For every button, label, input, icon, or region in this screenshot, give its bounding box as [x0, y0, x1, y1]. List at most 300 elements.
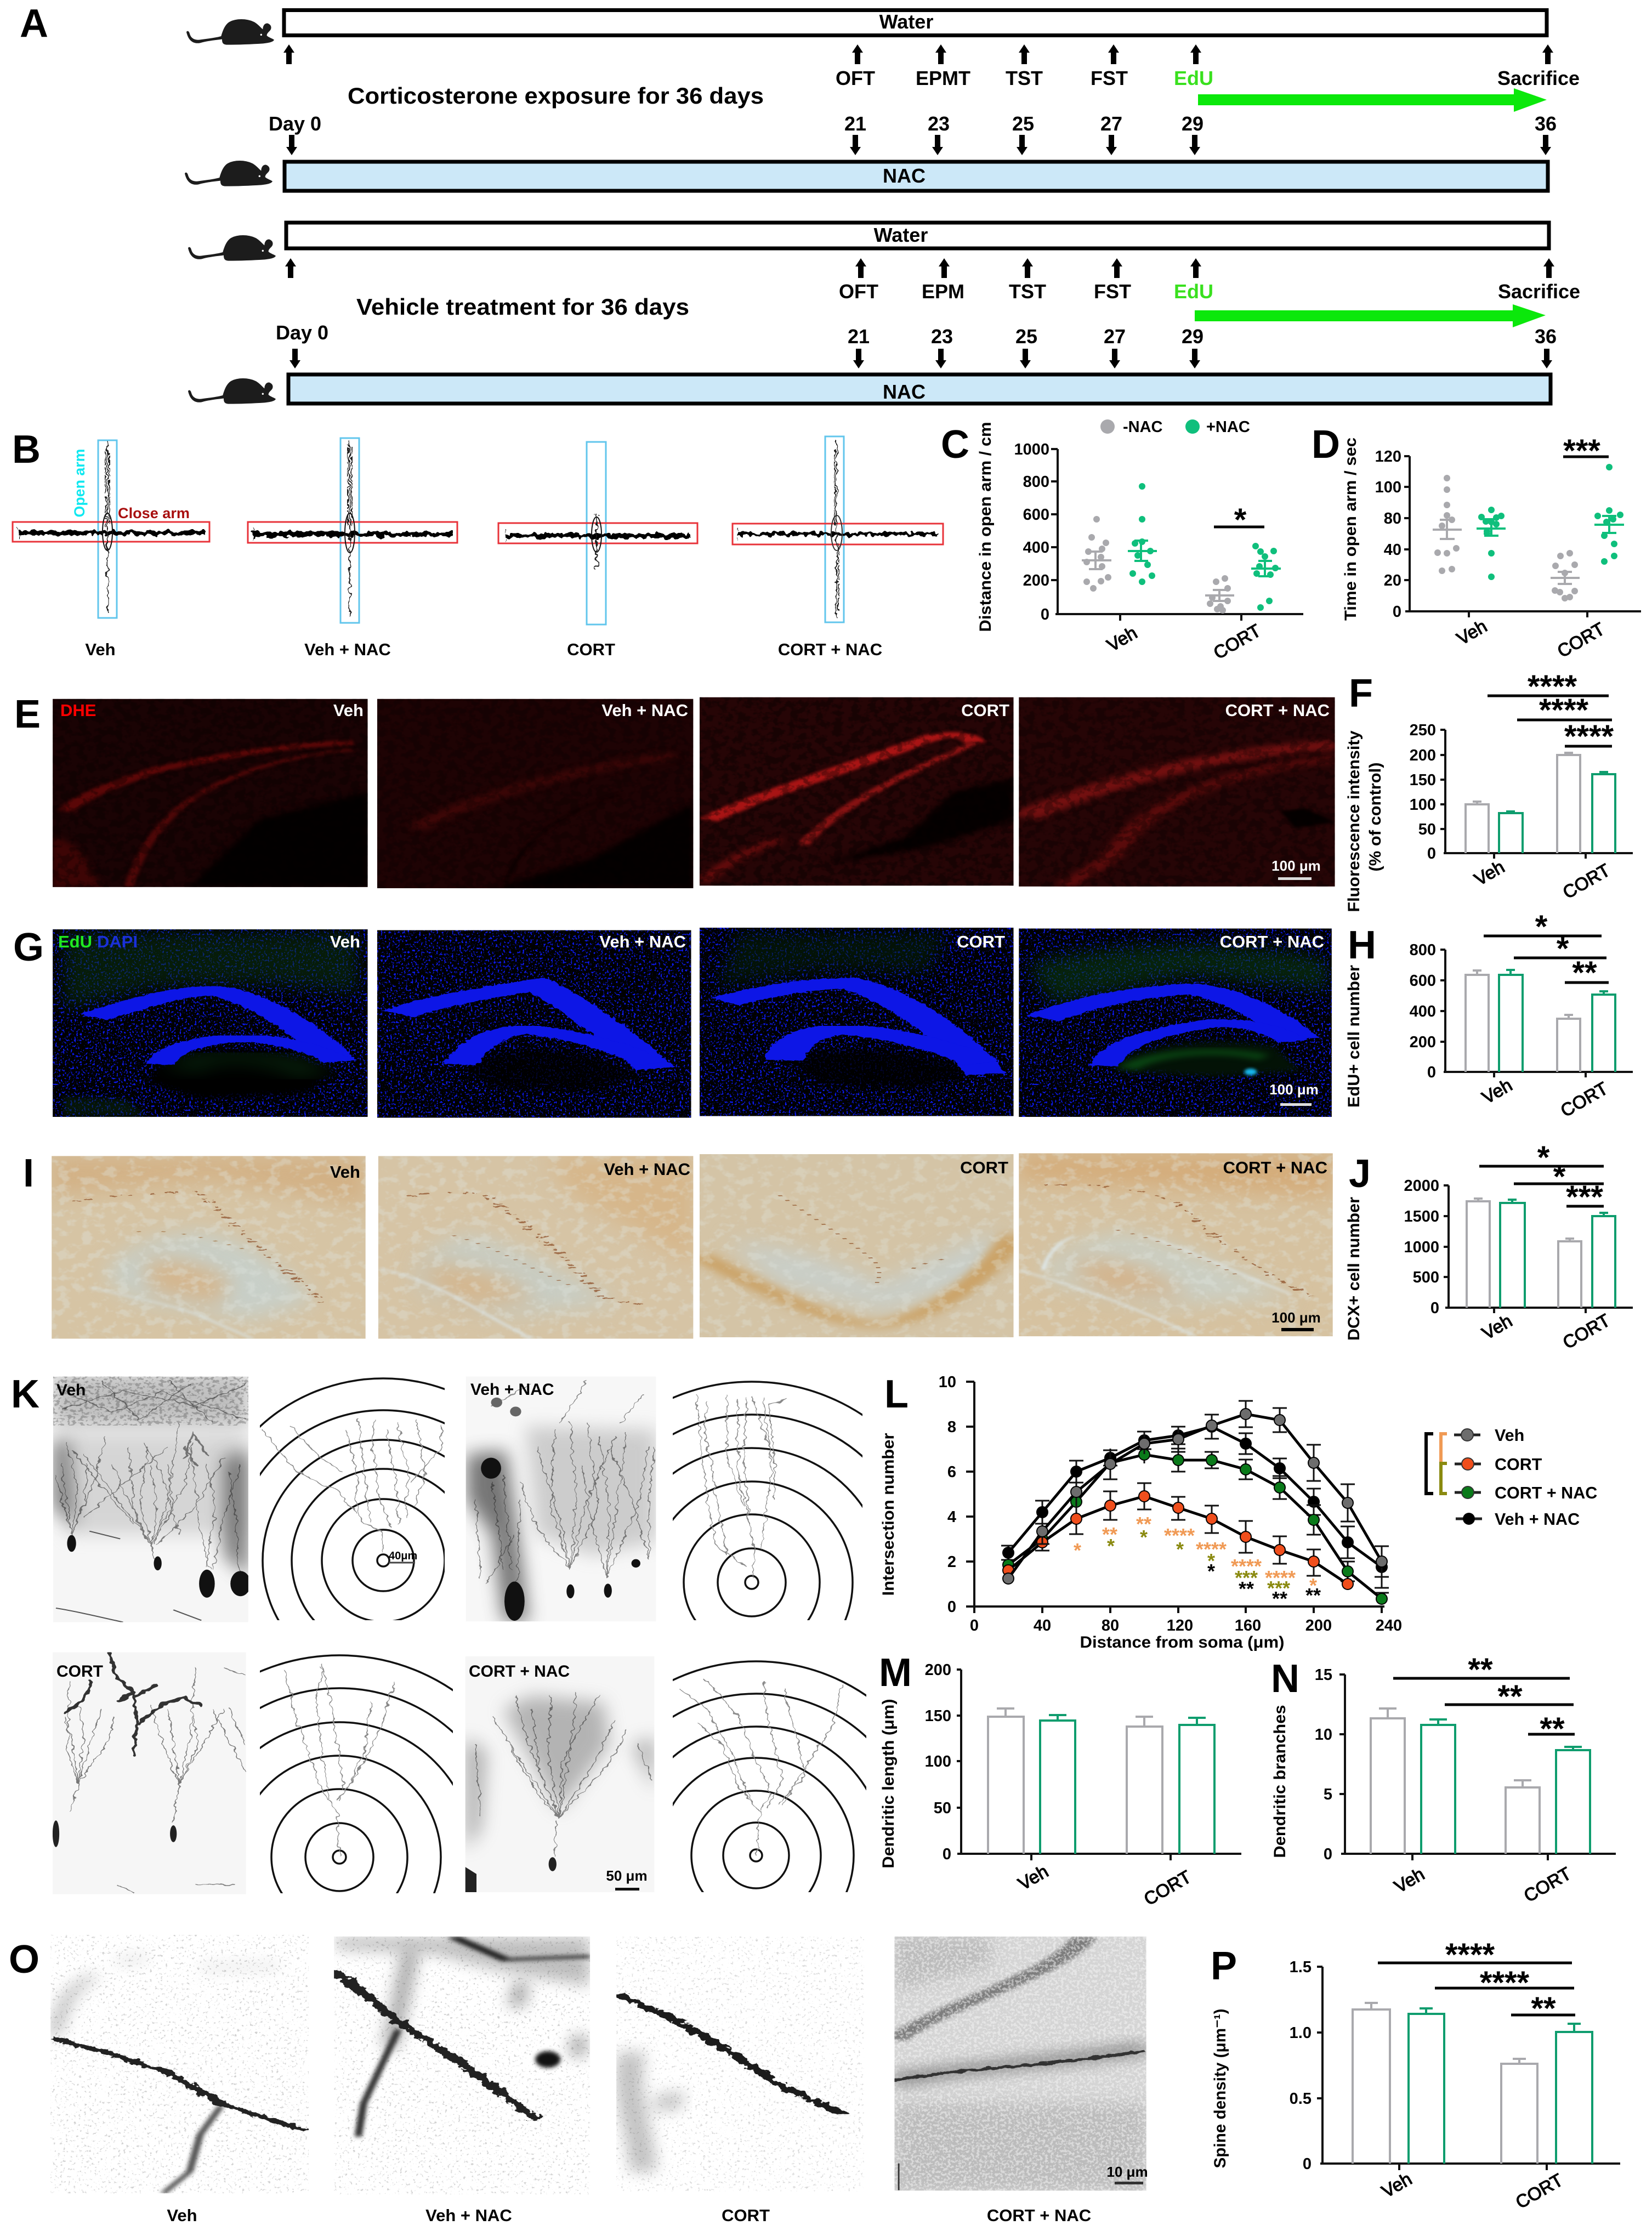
day labels row 2: 21 [848, 325, 870, 348]
x labels: Veh [1014, 1861, 1052, 1894]
y tick labels: 4 [947, 1508, 956, 1526]
y axis titles [1345, 730, 1384, 912]
photo labels I: Veh + NAC [604, 1160, 690, 1179]
y axis title: EdU+ cell number [1345, 965, 1363, 1108]
bars gray [988, 1708, 1162, 1854]
x tick labels: 160 [1235, 1617, 1261, 1634]
y axis titles: (% of control) [1366, 762, 1384, 872]
x labels: CORT [1559, 860, 1614, 902]
maze captions [85, 640, 882, 659]
photo: EdU CORT + NAC [1019, 928, 1332, 1117]
scale bar O: 10 μm [1106, 2164, 1148, 2180]
bars gray [1466, 753, 1580, 853]
day labels row 1: 36 [1535, 112, 1557, 135]
tick labels: 15 [1315, 1666, 1332, 1684]
scale bar K: 50 μm [606, 1867, 648, 1884]
y tick labels: 6 [947, 1463, 956, 1481]
panel letter F: F [1349, 672, 1373, 716]
x labels: CORT [1512, 2170, 1566, 2212]
significance stars: * [1207, 1560, 1215, 1582]
significance stars: **** [1265, 1566, 1296, 1589]
test labels row 1: TST [1006, 67, 1043, 89]
mean and error bars [1433, 520, 1580, 584]
axes and ticks [957, 1670, 1241, 1860]
significance stars: ** [1239, 1577, 1254, 1600]
x labels: Veh [1378, 2168, 1415, 2201]
day labels row 2: 23 [931, 325, 953, 348]
tick labels: 40 [1384, 541, 1401, 559]
significance [1484, 909, 1609, 991]
significance: *** [1563, 433, 1600, 469]
Sholl tracing: Veh + NAC [551, 1382, 952, 1783]
tick labels: 150 [925, 1707, 951, 1725]
significance: **** [1480, 1965, 1530, 2001]
photo labels G: CORT [957, 932, 1005, 951]
tick labels: 250 [1410, 722, 1436, 739]
maze: Veh + NAC [248, 438, 457, 623]
x tick labels: 40 [1034, 1617, 1051, 1634]
tick labels: 20 [1384, 572, 1401, 589]
maze captions: Veh [85, 640, 116, 659]
test labels row 1: OFT [836, 67, 875, 89]
mean and error bars green [1477, 516, 1624, 536]
x labels: Veh [1103, 622, 1140, 655]
significance stars: * [1140, 1526, 1148, 1548]
x tick labels: 0 [970, 1617, 979, 1634]
photo: spines CORT [616, 1937, 864, 2191]
panel letter J: J [1349, 1152, 1371, 1196]
x labels: CORT [1557, 1078, 1611, 1121]
photo labels E: Veh + NAC [601, 701, 688, 720]
tick labels: 0 [1303, 2155, 1312, 2173]
significance stars: * [1309, 1574, 1317, 1597]
significance stars: * [1176, 1538, 1184, 1560]
axes and ticks [1440, 730, 1633, 859]
day labels row 1: Day 0 [269, 112, 321, 135]
significance stars: ** [1305, 1584, 1321, 1606]
photo labels K [56, 1381, 570, 1681]
icon: mouse 1 [186, 19, 274, 45]
tick labels: 50 [934, 1799, 951, 1817]
photo labels I: CORT + NAC [1223, 1158, 1327, 1177]
panel L: Sholl line chart [879, 1372, 1597, 1651]
x labels: CORT [1554, 618, 1608, 661]
series: Veh + NAC [1001, 1415, 1389, 1588]
photo: spines Veh [50, 1935, 309, 2193]
significance stars: **** [1196, 1538, 1227, 1560]
panel I: DCX immunostaining [23, 1151, 1333, 1339]
significance: **** [1528, 669, 1577, 705]
photo labels G: CORT + NAC [1220, 932, 1324, 951]
panel letter E: E [14, 692, 41, 736]
timeline bar: NAC, vehicle group: NAC [883, 381, 926, 403]
y tick labels: 0 [947, 1598, 956, 1616]
panel M: dendritic length bars [879, 1651, 1241, 1909]
day labels row 2: 29 [1182, 325, 1203, 348]
day labels row 1: 25 [1012, 112, 1034, 135]
icon: mouse 4 [188, 378, 276, 404]
mean and error bars [1082, 552, 1234, 601]
tick labels: 600 [1023, 506, 1049, 524]
bars gray [1466, 970, 1580, 1072]
x labels [1478, 1310, 1614, 1353]
photo labels K: CORT [56, 1662, 103, 1681]
x labels: CORT [1559, 1310, 1614, 1353]
y tick labels: 10 [939, 1373, 956, 1391]
test labels row 2: EPM [922, 280, 964, 303]
day labels row 2: 36 [1535, 325, 1557, 348]
photo: DHE Veh + NAC [377, 699, 693, 888]
panel letter O: O [9, 1938, 39, 1982]
significance: **** [1445, 1937, 1495, 1973]
photo labels I: CORT [960, 1158, 1008, 1177]
day labels row 1: 21 [844, 112, 866, 135]
photo labels G [58, 932, 1324, 951]
scatter -NAC [1434, 475, 1578, 601]
series: CORT + NAC [1003, 1446, 1389, 1605]
significance stars [1074, 1513, 1321, 1610]
x labels [1471, 856, 1614, 902]
axes and ticks [966, 1382, 1384, 1613]
significance stars: * [1074, 1539, 1081, 1562]
icon: mouse 3 [188, 235, 276, 261]
test labels row 2: FST [1094, 280, 1131, 303]
bars green [1040, 1715, 1214, 1854]
panel G: EdU DAPI microscopy [13, 926, 1332, 1118]
timeline bar: Water, corticosterone group [284, 10, 1547, 35]
captions O [167, 2206, 1091, 2225]
timeline bar: NAC, corticosterone group [285, 162, 1548, 191]
photo: neurons CORT + NAC [465, 1656, 654, 1892]
tick labels: 100 [1375, 479, 1401, 496]
x labels [1478, 1075, 1611, 1121]
y tick labels: 2 [947, 1553, 956, 1571]
photo labels K: CORT + NAC [469, 1662, 570, 1681]
photo labels E: DHE [60, 701, 96, 720]
tick labels: 200 [1410, 1034, 1436, 1051]
tick labels [925, 1661, 951, 1863]
significance stars: * [1207, 1549, 1215, 1572]
scale bar E: 100 μm [1271, 858, 1321, 874]
test labels row 1: FST [1091, 67, 1128, 89]
tick labels: 0 [943, 1846, 951, 1863]
maze captions: CORT [567, 640, 615, 659]
x labels: CORT [1140, 1866, 1195, 1909]
y axis titles: Fluorescence intensity [1345, 730, 1363, 912]
x labels: Veh [1453, 616, 1490, 649]
significance: * [1535, 909, 1548, 945]
legend [1100, 418, 1250, 436]
tick labels: 400 [1410, 1003, 1436, 1020]
tick labels: 120 [1375, 448, 1401, 465]
legend: -NAC [1123, 418, 1163, 436]
maze: Veh [13, 440, 209, 618]
day labels row 2 [276, 321, 1557, 348]
x tick labels: 120 [1167, 1617, 1193, 1634]
legend: Veh + NAC [1495, 1510, 1580, 1529]
significance [1479, 1140, 1604, 1215]
tick labels: 100 [1410, 796, 1436, 814]
photo labels E: CORT [961, 701, 1009, 720]
x labels [1453, 616, 1608, 661]
x axis title: Distance from soma (μm) [1080, 1633, 1284, 1651]
bars gray [1371, 1708, 1540, 1854]
photo: neurons Veh + NAC [466, 1377, 656, 1621]
captions O: CORT + NAC [987, 2206, 1091, 2225]
y axis title: Time in open arm / sec [1342, 438, 1360, 621]
tick labels: 500 [1413, 1269, 1439, 1286]
arrows up row 1 [283, 44, 1553, 64]
photo labels K: Veh + NAC [470, 1381, 554, 1399]
timeline bar: Water, vehicle group: Water [874, 224, 928, 246]
axes and ticks [1444, 1185, 1633, 1313]
heading: corticosterone exposure: Corticosterone exposure for 36 days [348, 83, 764, 109]
bars green [1499, 772, 1615, 853]
tick labels: 2000 [1404, 1177, 1439, 1195]
tick labels: 150 [1410, 771, 1436, 789]
tick labels: 600 [1410, 972, 1436, 990]
test labels row 1: EPMT [916, 67, 970, 89]
mean and error bars green [1128, 541, 1281, 576]
y axis title: Dendritic branches [1271, 1705, 1289, 1858]
x labels [1378, 2168, 1566, 2212]
series: CORT [1003, 1483, 1353, 1589]
timeline bar: Water, vehicle group [286, 223, 1549, 248]
photo: spines Veh + NAC [334, 1937, 590, 2194]
significance stars: * [1107, 1535, 1115, 1557]
panel N: dendritic branches bars [1271, 1652, 1616, 1906]
arrow: green EdU period 1 [1198, 88, 1547, 112]
tick labels [1410, 941, 1436, 1081]
axes and ticks [1440, 950, 1633, 1077]
scale bar G: 100 μm [1269, 1081, 1319, 1098]
x labels [1014, 1861, 1195, 1909]
panel letter G: G [13, 926, 44, 969]
panel J: DCX cell number bars [1345, 1140, 1633, 1353]
x labels: CORT [1520, 1863, 1575, 1906]
test labels row 1: EdU [1174, 67, 1213, 89]
axes and ticks [1317, 1967, 1620, 2170]
significance stars: **** [1164, 1524, 1195, 1547]
panel F: fluorescence intensity bars [1345, 669, 1633, 912]
tick labels: 1000 [1014, 441, 1049, 458]
legend: CORT + NAC [1495, 1484, 1597, 1502]
tick labels: 0 [1041, 606, 1049, 623]
tick labels: 400 [1023, 539, 1049, 557]
day labels row 1: 29 [1182, 112, 1203, 135]
x labels: Veh [1390, 1864, 1428, 1897]
photo labels G: DAPI [97, 932, 138, 951]
legend: Veh [1495, 1426, 1524, 1445]
Sholl tracing: CORT + NAC [562, 1661, 950, 2050]
significance: * [1234, 502, 1247, 538]
maze captions: Veh + NAC [304, 640, 391, 659]
tick labels [1404, 1177, 1439, 1317]
photo: neurons Veh [53, 1374, 251, 1622]
y axis title: Intersection number [879, 1433, 898, 1596]
heading: vehicle treatment: Vehicle treatment for 36 days [356, 294, 689, 320]
significance [1214, 502, 1264, 538]
tick labels: 1000 [1404, 1239, 1439, 1256]
panel P: spine density bars [1211, 1937, 1620, 2212]
axes and ticks [1404, 456, 1641, 617]
panel letter P: P [1211, 1944, 1237, 1988]
panel letter I: I [23, 1151, 34, 1195]
scatter +NAC [1129, 483, 1279, 611]
photo labels I [330, 1158, 1327, 1182]
significance [1488, 669, 1614, 754]
day labels row 1: 27 [1100, 112, 1122, 135]
arrow: green EdU period 2 [1195, 304, 1546, 327]
legend: CORT [1495, 1455, 1542, 1474]
panel letter H: H [1348, 923, 1376, 967]
x tick labels: 240 [1376, 1617, 1402, 1634]
significance: ** [1531, 1991, 1556, 2026]
x tick labels: 200 [1305, 1617, 1332, 1634]
y tick labels [939, 1373, 956, 1616]
bars gray [1467, 1199, 1581, 1308]
tick labels [1410, 722, 1436, 862]
tick labels: 0 [1427, 845, 1436, 862]
day labels row 2: 25 [1015, 325, 1037, 348]
significance: ** [1540, 1711, 1565, 1747]
tick labels [1315, 1666, 1332, 1863]
photo labels K: Veh [56, 1381, 86, 1399]
significance: * [1553, 1159, 1566, 1195]
tick labels [1375, 448, 1401, 621]
panel letter N: N [1271, 1657, 1299, 1701]
photo: DHE Veh [53, 699, 368, 887]
tick labels: 0.5 [1290, 2090, 1312, 2108]
legend: +NAC [1206, 418, 1250, 436]
axes and ticks [1339, 1674, 1616, 1860]
scale bar G [1269, 1081, 1319, 1106]
Sholl tracing: CORT [138, 1655, 541, 2059]
photo labels E: CORT + NAC [1225, 701, 1330, 720]
timeline bar: NAC, corticosterone group: NAC [883, 164, 926, 187]
captions O: Veh [167, 2206, 197, 2225]
day labels row 2: 27 [1104, 325, 1126, 348]
x tick labels: 80 [1102, 1617, 1119, 1634]
scatter -NAC [1083, 516, 1231, 614]
bars green [1409, 2008, 1592, 2164]
test labels row 2 [839, 280, 1580, 303]
y axis title: Spine density (μm⁻¹) [1211, 2009, 1229, 2168]
panel letter A: A [20, 2, 48, 46]
photo labels G: EdU [58, 932, 92, 951]
bars green [1500, 1200, 1615, 1308]
tick labels: 0 [1324, 1846, 1332, 1863]
panel O: dendritic spines [9, 1935, 1148, 2225]
significance: **** [1539, 692, 1589, 728]
photo labels E [60, 701, 1330, 720]
tick labels: 200 [925, 1661, 951, 1679]
tick labels: 800 [1023, 473, 1049, 491]
panel letter K: K [11, 1372, 39, 1416]
photo labels I: Veh [330, 1162, 360, 1182]
day labels row 1 [269, 112, 1557, 135]
x labels [1390, 1863, 1575, 1906]
x labels: CORT [1210, 620, 1264, 663]
panel B: elevated plus maze tracks [12, 428, 943, 659]
significance: ** [1572, 955, 1597, 991]
text: open arm: Open arm [71, 449, 88, 518]
tick labels: 0 [1427, 1064, 1436, 1081]
day labels row 1: 23 [928, 112, 950, 135]
day labels row 2: Day 0 [276, 321, 328, 344]
Sholl tracing: Veh [201, 1378, 565, 1742]
arrows down row 1 [286, 135, 1551, 155]
test labels row 2: EdU [1174, 280, 1213, 303]
test labels row 2: TST [1009, 280, 1046, 303]
scale bar I: 100 μm [1271, 1309, 1321, 1326]
tick labels: 1.5 [1290, 1958, 1312, 1976]
bars green [1499, 970, 1615, 1072]
text: close arm: Close arm [118, 505, 190, 521]
panel E: DHE microscopy [14, 692, 1335, 888]
bars green [1421, 1719, 1590, 1854]
significance: * [1557, 931, 1569, 967]
panel H: EdU cell number bars [1345, 909, 1633, 1121]
significance: **** [1564, 719, 1614, 754]
series: Veh [1003, 1401, 1389, 1584]
significance stars: ** [1102, 1523, 1117, 1546]
panel letter D: D [1312, 423, 1340, 467]
y axis title: Distance in open arm / cm [977, 422, 995, 632]
x labels: Veh [1478, 1310, 1515, 1343]
y axis title: DCX+ cell number [1345, 1197, 1363, 1341]
legend [1426, 1426, 1597, 1529]
test labels row 2: Sacrifice [1498, 280, 1580, 303]
icon: mouse 2 [185, 161, 273, 186]
significance [1393, 1652, 1575, 1747]
panel letter C: C [941, 423, 969, 467]
panel letter B: B [12, 428, 41, 472]
tick labels: 200 [1410, 747, 1436, 764]
photo: EdU CORT [700, 928, 1014, 1116]
bars gray [1353, 2003, 1537, 2164]
maze: CORT + NAC [733, 436, 943, 622]
x tick labels [970, 1617, 1402, 1634]
photo: neurons CORT [53, 1652, 246, 1894]
significance: * [1537, 1140, 1550, 1176]
significance stars: *** [1267, 1577, 1290, 1599]
tick labels: 0 [1393, 603, 1401, 621]
timeline bar: Water, corticosterone group: Water [879, 10, 933, 33]
scatter +NAC [1478, 464, 1623, 580]
panel A: experimental timelines [20, 2, 1580, 404]
tick labels: 1.0 [1290, 2024, 1312, 2042]
tick labels: 80 [1384, 510, 1401, 527]
tick labels: 10 [1315, 1726, 1332, 1744]
tick labels: 800 [1410, 941, 1436, 959]
test labels row 2: OFT [839, 280, 878, 303]
significance [1378, 1937, 1575, 2026]
tick labels: 1500 [1404, 1208, 1439, 1225]
significance: *** [1566, 1179, 1603, 1215]
photo: DCX Veh [52, 1156, 366, 1339]
captions O: CORT [722, 2206, 770, 2225]
significance stars: ** [1136, 1513, 1151, 1535]
panel letter L: L [884, 1372, 909, 1416]
photo: DHE CORT + NAC [1019, 697, 1335, 887]
photo labels G: Veh + NAC [599, 932, 686, 951]
panel letter M: M [879, 1651, 912, 1695]
photo: EdU Veh [53, 929, 368, 1117]
x labels: Veh [1471, 856, 1508, 889]
photo: EdU Veh + NAC [377, 930, 691, 1118]
photo: DCX CORT [700, 1154, 1014, 1337]
